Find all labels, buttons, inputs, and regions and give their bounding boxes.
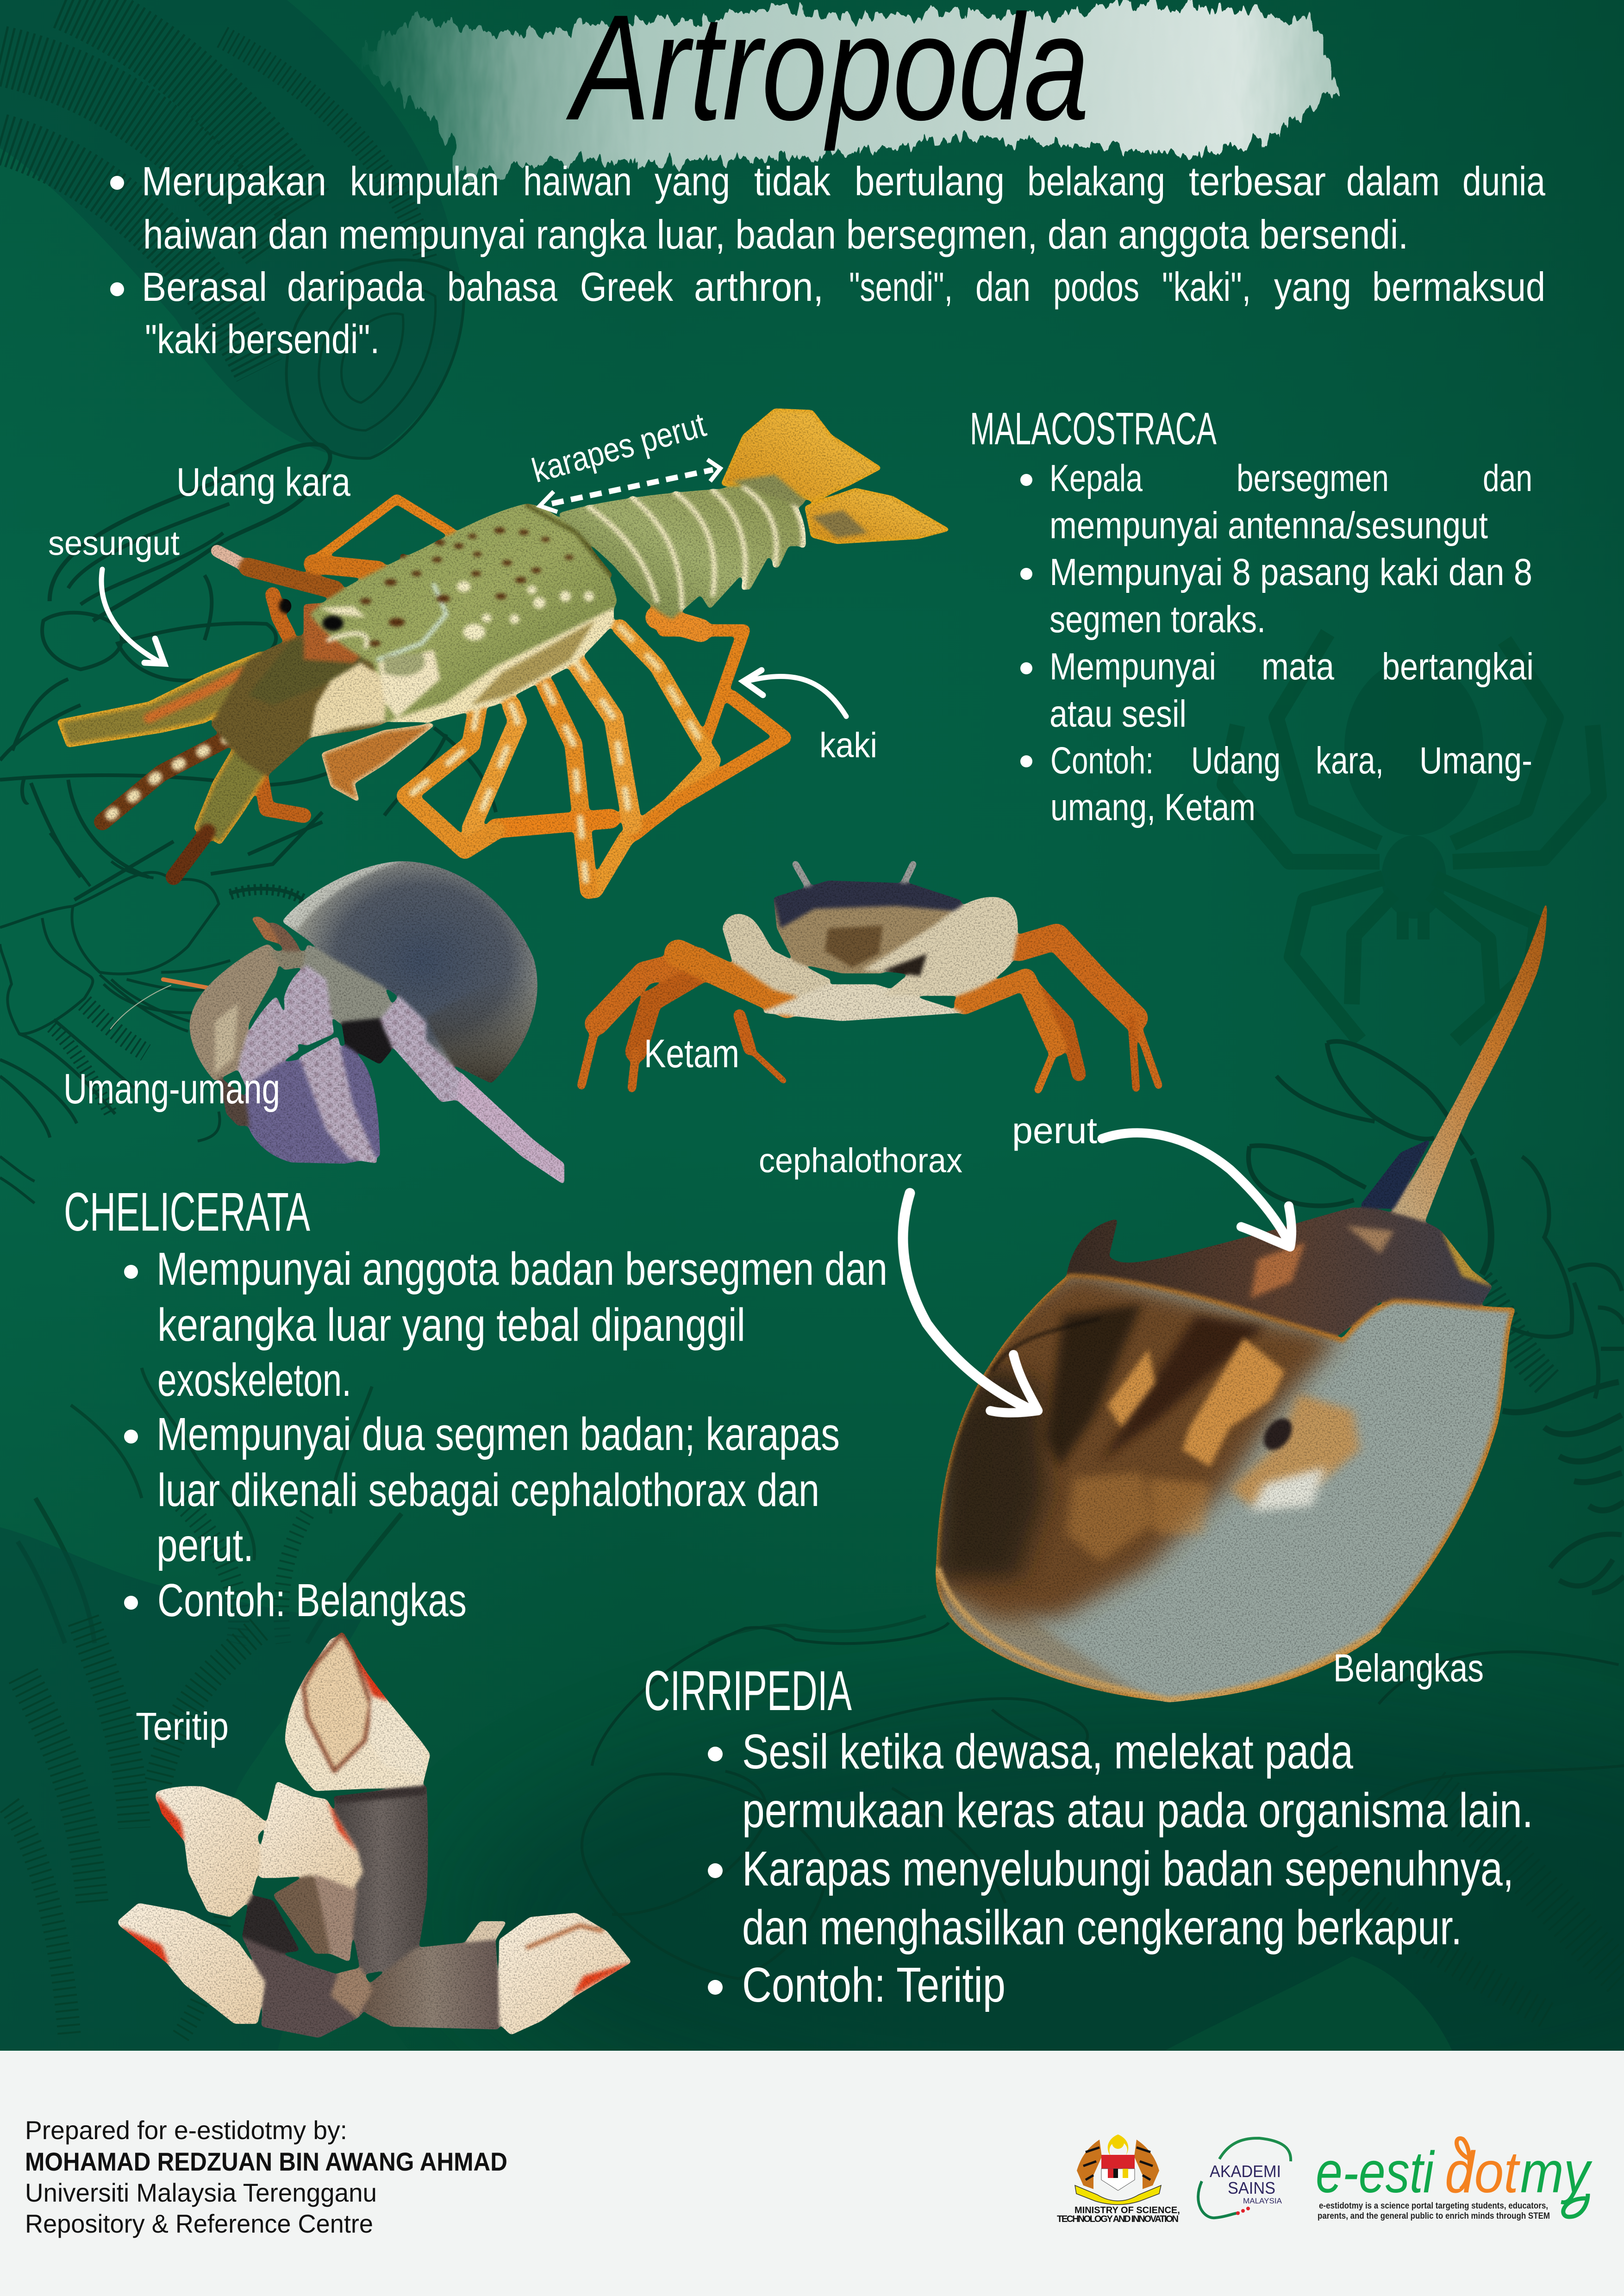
logo: e-estidotmy: e-esti <box>1316 2140 1435 2205</box>
crab left claw <box>723 914 831 1002</box>
label: sesungut: sesungut <box>48 524 180 562</box>
text block: Chelicerata bullets: exoskeleton. <box>157 1354 351 1406</box>
decoration: spider silhouette <box>1224 633 1599 1040</box>
heading: MALACOSTRACA: MALACOSTRACA <box>970 403 1217 454</box>
horseshoe crab eye <box>1258 1415 1298 1454</box>
logo: Akademi Sains Malaysia <box>1198 2138 1291 2218</box>
text block: Chelicerata bullets: Mempunyai anggota badan bersegmen dan <box>156 1243 887 1295</box>
intro text block: podos <box>1053 264 1139 310</box>
text block: Malacostraca bullets: Mempunyai <box>1049 646 1216 688</box>
decoration: trilobite line art <box>0 0 464 459</box>
footer credits: Repository & Reference Centre <box>25 2209 373 2238</box>
arrow: kaki <box>743 670 846 716</box>
crab right claw <box>862 897 1018 996</box>
barnacle top capitulum <box>285 1634 430 1791</box>
lobster carapace <box>310 504 617 722</box>
lobster spots <box>319 528 594 676</box>
intro text block: tidak <box>754 158 831 204</box>
text block: Malacostraca bullets <box>1020 457 1534 828</box>
lobster mouth legs <box>322 725 434 801</box>
text block: Malacostraca bullets: Mempunyai 8 pasang kaki dan 8 <box>1049 551 1532 593</box>
logo: Akademi Sains Malaysia: MALAYSIA <box>1243 2196 1282 2205</box>
decoration: barnacle line art <box>582 1623 1624 2050</box>
lobster eyes <box>279 599 344 631</box>
text block: Cirripedia bullets <box>708 1724 1533 2012</box>
decoration: seaweed line art <box>18 1368 926 1643</box>
crab body <box>760 984 964 1021</box>
intro text block: arthron, <box>694 264 824 310</box>
text block: Malacostraca bullets: bersegmen <box>1237 457 1389 499</box>
hermit crab antenna <box>111 979 207 1029</box>
heading: CHELICERATA: CHELICERATA <box>64 1182 310 1243</box>
text block: Chelicerata bullets: Mempunyai dua segmen badan; karapas <box>156 1408 840 1460</box>
text block: Chelicerata bullets: Contoh: Belangkas <box>157 1574 467 1626</box>
text block: Malacostraca bullets: dan <box>1483 457 1532 499</box>
intro text block: bermaksud <box>1372 264 1545 310</box>
arrow: karapes perut span <box>540 460 720 512</box>
text block: Malacostraca bullets: Umang- <box>1419 740 1532 782</box>
text block: Chelicerata bullets <box>124 1243 887 1626</box>
text block: Malacostraca bullets: mata <box>1262 646 1334 688</box>
text block: Malacostraca bullets: Kepala <box>1049 457 1143 499</box>
horseshoe crab illustration <box>931 897 1547 1708</box>
horseshoe crab shell shading <box>931 1270 1360 1708</box>
intro text block: yang <box>655 158 730 204</box>
logo: e-estidotmy tagline: parents, and the general public to enrich minds through STEM <box>1318 2211 1550 2221</box>
logo: ministry name: MINISTRY OF SCIENCE, <box>1074 2205 1180 2215</box>
decoration: right side crab line art <box>1249 1041 1624 1593</box>
horseshoe crab shell <box>938 1276 1513 1699</box>
hermit crab inner body <box>300 944 395 1045</box>
lobster antenna base <box>59 653 279 746</box>
text block: Malacostraca bullets: bertangkai <box>1382 646 1534 688</box>
intro text block: "kaki", <box>1162 264 1251 310</box>
intro text block: yang <box>1274 264 1351 310</box>
logo: ministry name: TECHNOLOGY AND INNOVATION <box>1057 2214 1179 2224</box>
lobster legs <box>217 499 784 890</box>
text block: Malacostraca bullets: segmen toraks. <box>1049 598 1266 641</box>
text block: Malacostraca bullets: umang, Ketam <box>1050 786 1255 828</box>
label: perut: perut <box>1012 1110 1097 1151</box>
intro text block: haiwan <box>523 158 632 204</box>
footer credits: MOHAMAD REDZUAN BIN AWANG AHMAD <box>25 2147 507 2176</box>
text block: Cirripedia bullets: Contoh: Teritip <box>742 1958 1006 2012</box>
heading: CIRRIPEDIA: CIRRIPEDIA <box>644 1659 852 1722</box>
crab eye stalks <box>795 864 913 895</box>
label: Ketam: Ketam <box>644 1032 739 1076</box>
label: Udang kara: Udang kara <box>176 460 350 504</box>
barnacle stalks <box>334 1786 428 1975</box>
intro text block: bertulang <box>855 158 1005 204</box>
logo: Akademi Sains Malaysia: SAINS <box>1228 2178 1275 2197</box>
text block: Chelicerata bullets: perut. <box>156 1519 254 1571</box>
logo: ministry crest <box>1057 2134 1180 2224</box>
crab illustration <box>581 864 1159 1090</box>
text block: Malacostraca bullets: Udang <box>1191 740 1280 782</box>
decoration: crab line art behind lobster <box>0 444 496 902</box>
lobster illustration <box>59 410 949 890</box>
logo: e-estidotmy tagline <box>1318 2201 1550 2221</box>
intro text block: Berasal <box>142 264 267 310</box>
footer credits: Prepared for e-estidotmy by: <box>25 2116 347 2145</box>
text block: Malacostraca bullets: mempunyai antenna/sesungut <box>1049 504 1488 547</box>
intro text block: "kaki bersendi". <box>145 316 380 362</box>
logo: e-estidotmy tagline: e-estidotmy is a science portal targeting students, educators, <box>1319 2201 1548 2211</box>
arrow: perut <box>1102 1133 1292 1247</box>
intro text block: Greek <box>580 264 674 310</box>
horseshoe crab tail <box>1360 1139 1431 1209</box>
label: kaki: kaki <box>819 726 877 765</box>
intro text block: dunia <box>1462 158 1545 204</box>
lobster tail fan <box>722 410 880 500</box>
intro text block: kumpulan <box>350 158 499 204</box>
title brush stroke <box>352 1 1336 174</box>
barnacle right capitulum <box>499 1913 631 2035</box>
hermit crab legs <box>238 996 300 1086</box>
text block: Cirripedia bullets: dan menghasilkan cengkerang berkapur. <box>742 1900 1462 1955</box>
crab carapace <box>774 881 964 973</box>
barnacle left capitula <box>156 1786 267 1917</box>
horseshoe crab crack line <box>992 1318 1101 1371</box>
intro text block: bahasa <box>447 264 557 310</box>
intro text block: "sendi", <box>849 264 953 310</box>
text block: Malacostraca bullets: atau sesil <box>1049 693 1187 735</box>
crab legs <box>581 937 1159 1090</box>
text block: Malacostraca bullets: Contoh: <box>1050 740 1154 782</box>
hermit crab face <box>190 944 280 1081</box>
text block: Cirripedia bullets: Sesil ketika dewasa, melekat pada <box>742 1724 1353 1779</box>
label: karapes perut: karapes perut <box>528 405 710 490</box>
footer credits: Universiti Malaysia Terengganu <box>25 2178 377 2207</box>
intro text block: belakang <box>1027 158 1165 204</box>
text block: Malacostraca bullets: kara, <box>1316 740 1384 782</box>
footer panel <box>0 2051 1624 2296</box>
text block: Chelicerata bullets: kerangka luar yang tebal dipanggil <box>157 1299 745 1351</box>
intro text block: haiwan dan mempunyai rangka luar, badan bersegmen, dan anggota bersendi. <box>143 212 1408 257</box>
arrow: cephalothorax <box>903 1193 1038 1413</box>
label: Teritip: Teritip <box>136 1705 229 1748</box>
intro text block: daripada <box>287 264 425 310</box>
hermit crab illustration <box>190 861 564 1185</box>
intro text block: dan <box>975 264 1031 310</box>
barnacle lower left capitulum <box>118 1903 265 2024</box>
footer credits <box>25 2116 507 2238</box>
logo: e-estidotmy: my <box>1520 2140 1593 2205</box>
horseshoe crab lower rim <box>938 1568 1380 1699</box>
label: Belangkas: Belangkas <box>1333 1646 1484 1690</box>
intro text block: dalam <box>1346 158 1440 204</box>
text block: Chelicerata bullets: luar dikenali sebagai cephalothorax dan <box>157 1464 819 1516</box>
logo: e-estidotmy: dot <box>1445 2140 1521 2205</box>
arrow: sesungut <box>101 569 164 664</box>
hermit crab shell <box>282 861 537 1083</box>
intro text block: terbesar <box>1189 158 1326 204</box>
label: Umang-umang: Umang-umang <box>63 1065 280 1113</box>
intro text block: Merupakan <box>142 158 326 204</box>
decoration: prawn line art <box>0 833 307 1203</box>
horseshoe crab abdomen <box>1067 1207 1493 1335</box>
lobster belly band <box>387 608 614 722</box>
logo: Akademi Sains Malaysia: AKADEMI <box>1210 2162 1281 2181</box>
decoration: engraved shape behind barnacles <box>0 1527 361 2050</box>
logo: e-estidotmy <box>1316 2138 1593 2221</box>
lobster head mass <box>211 630 387 777</box>
lobster abdomen <box>558 481 806 619</box>
barnacle illustration <box>118 1634 631 2038</box>
hermit crab large claw <box>246 1045 380 1164</box>
intro text block <box>110 158 1545 362</box>
label: cephalothorax: cephalothorax <box>759 1141 962 1180</box>
